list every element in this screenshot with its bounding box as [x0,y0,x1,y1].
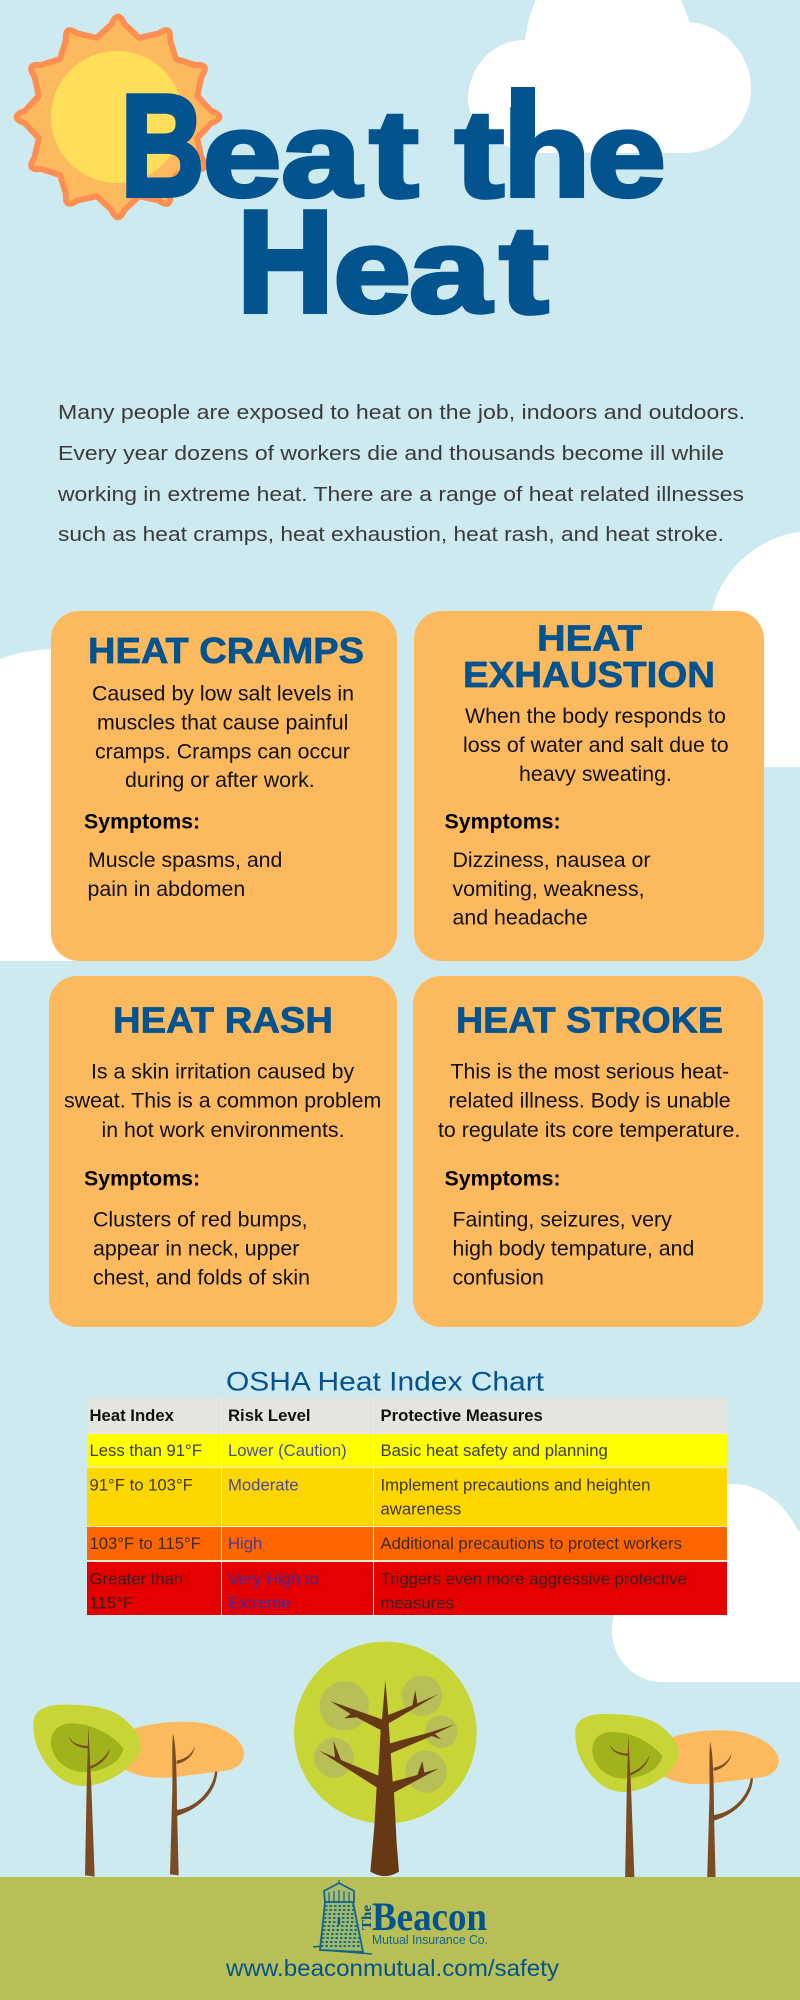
symptoms: heat exhaustion: Symptoms: [444,810,561,834]
table row: very high risk: measures [380,1593,454,1612]
symptoms: heat rash [84,1167,310,1290]
table header row: Risk Level [228,1406,311,1425]
table header row: Heat Index [90,1406,175,1425]
website url: www.beaconmutual.com/safety [225,1955,560,1981]
logo wordmark: Beacon [372,1894,487,1939]
cloud: middle right [700,532,800,767]
description: heat exhaustion: heavy sweating. [519,762,672,786]
cloud: middle left [0,649,130,961]
description: heat cramps: Caused by low salt levels in [92,682,354,706]
symptoms: heat cramps: Symptoms: [84,810,200,834]
title: t [499,201,549,340]
cloud: lower right [612,1484,800,1682]
table row: moderate risk: Moderate [228,1476,298,1495]
symptoms: heat rash: Clusters of red bumps, [93,1208,308,1232]
symptoms: heat rash: appear in neck, upper [93,1236,299,1260]
symptoms: heat stroke: Fainting, seizures, very [452,1208,672,1232]
description: heat cramps: cramps. Cramps can occur [95,740,350,764]
table row: lower risk: Basic heat safety and planning [380,1441,608,1460]
title: h [503,88,591,222]
table row: moderate risk: awareness [380,1500,461,1519]
description: heat exhaustion: When the body responds to [465,704,726,728]
description: heat cramps: during or after work. [125,768,315,792]
symptoms: heat cramps [84,810,282,901]
intro text [57,401,745,546]
intro text: Every year dozens of workers die and thousands become ill while [58,442,724,465]
symptoms: heat exhaustion: Dizziness, nausea or [452,848,650,872]
description: heat stroke: This is the most serious heat- [450,1060,729,1084]
description: heat rash: Is a skin irritation caused by [91,1060,355,1084]
title: e [587,88,666,222]
heat index table [87,1398,727,1615]
heading: heat stroke: HEAT STROKE [456,1000,723,1040]
intro text: working in extreme heat. There are a range of heat related illnesses [57,483,744,506]
table row: moderate risk: Implement precautions and heighten [380,1476,650,1495]
title: B [120,64,204,226]
symptoms: heat exhaustion: vomiting, weakness, [452,877,645,901]
table row: very high risk: Triggers even more aggressive protective [380,1569,687,1588]
intro text: such as heat cramps, heat exhaustion, heat rash, and heat stroke. [58,523,724,546]
symptoms: heat stroke [444,1167,694,1290]
panel: heat cramps [51,611,397,961]
symptoms: heat cramps: Muscle spasms, and [88,848,282,872]
trees: right pair [575,1714,779,1879]
description: heat stroke: related illness. Body is unable [448,1089,731,1113]
heading: heat exhaustion: HEAT [537,618,642,658]
description: heat stroke [438,1060,740,1142]
symptoms: heat cramps: pain in abdomen [88,877,245,901]
description: heat rash [64,1060,381,1142]
cloud: top right [468,0,751,153]
description: heat exhaustion: loss of water and salt due to [463,733,729,757]
table header row [87,1398,727,1433]
table row: very high risk: 115°F [90,1593,133,1612]
table row: very high risk: Greater than [90,1569,183,1588]
heading: heat exhaustion [463,618,715,695]
logo tagline: Mutual Insurance Co. [372,1932,488,1947]
description: heat exhaustion [463,704,729,786]
description: heat stroke: to regulate its core temperature. [438,1118,740,1142]
description: heat rash: sweat. This is a common problem [64,1089,381,1113]
description: heat cramps: muscles that cause painful [97,710,348,734]
table row: lower risk: Less than 91°F [90,1441,202,1460]
table row: high risk [87,1527,727,1560]
title: a [281,88,363,222]
table row: moderate risk [87,1468,727,1526]
symptoms: heat stroke: Symptoms: [444,1167,561,1191]
heading: heat exhaustion: EXHAUSTION [463,654,715,695]
title: t [369,85,419,224]
trees: left pair [33,1705,244,1877]
table row: high risk: Additional precautions to protect workers [380,1534,682,1553]
logo: beacon mutual [313,1880,488,1954]
symptoms: heat rash: chest, and folds of skin [93,1266,310,1290]
table row: high risk: 103°F to 115°F [90,1534,201,1553]
table row: lower risk [87,1434,727,1467]
symptoms: heat exhaustion: and headache [452,906,588,930]
ground [0,1877,800,2000]
title: H [237,180,334,342]
table row: very high risk: Very High to [228,1569,319,1588]
symptoms: heat exhaustion [444,810,650,930]
title: t [454,85,504,224]
panel: heat rash [49,976,397,1327]
chart title: OSHA Heat Index Chart [226,1366,545,1396]
title: e [333,204,411,338]
title: e [203,88,281,222]
table row: lower risk: Lower (Caution) [228,1441,347,1460]
symptoms: heat rash: Symptoms: [84,1167,200,1191]
description: heat rash: in hot work environments. [102,1118,345,1142]
tree: center [294,1642,477,1876]
table row: very high risk [87,1562,727,1615]
title [120,64,666,342]
table row: moderate risk: 91°F to 103°F [90,1476,193,1495]
icon: sun [17,17,219,217]
symptoms: heat stroke: high body tempature, and [452,1236,694,1260]
heading: heat rash: HEAT RASH [113,1000,333,1040]
panel: heat stroke [413,976,763,1327]
description: heat cramps [92,682,354,792]
heading: heat cramps: HEAT CRAMPS [88,630,364,671]
title: a [409,204,493,338]
table header row: Protective Measures [380,1406,543,1425]
intro text: Many people are exposed to heat on the job, indoors and outdoors. [58,401,745,424]
logo "The": The [360,1905,375,1930]
table row: high risk: High [228,1534,262,1553]
icon: lighthouse tower [313,1880,372,1954]
table row: very high risk: Extreme [228,1593,290,1612]
symptoms: heat stroke: confusion [452,1266,544,1290]
panel: heat exhaustion [414,611,764,961]
